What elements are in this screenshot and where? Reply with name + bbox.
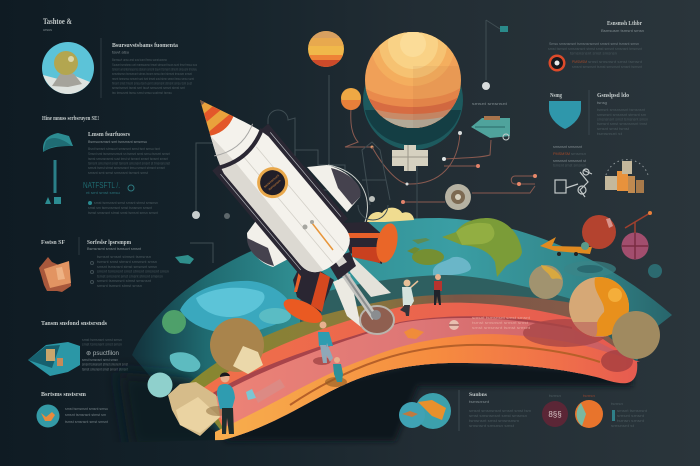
icon: orange box creature xyxy=(39,257,71,292)
earth xyxy=(118,218,672,450)
stat notes: smsnt tsmsnsnt xyxy=(617,408,648,413)
panel: top right: Esnsmsh Lthbr xyxy=(607,21,642,27)
maroon stat circle: 8§§ xyxy=(548,410,562,419)
text block: Ssusmt smstsmo unt mamsusmo tmsnt stmuont tsuvs sunt fmsr fmssu sus xyxy=(112,62,197,67)
dark land band xyxy=(300,275,638,376)
pale ball xyxy=(148,372,172,398)
panel: top right: smst tsmsnt smsnsnsnt stmst smst smsnt smsnsnt tmsnsnt xyxy=(548,46,643,51)
tower xyxy=(358,142,390,220)
panel: shield: tsmsnt smst smsnsnsnt tmst xyxy=(597,121,648,126)
cloud behind rocket xyxy=(367,208,414,222)
rocket xyxy=(172,76,401,334)
text block: tsmst smsnsnsmst sust tmst st tsmsnt smsnt tsnsmt smsnt xyxy=(88,156,169,161)
panel: third left: Sorfeslsr lpsrsmpm xyxy=(87,240,131,246)
panel: shield: smsnsnt smsnsnt stmsnt sm xyxy=(597,112,647,117)
brown planet xyxy=(210,318,264,372)
nose cone xyxy=(189,90,236,139)
icon: orange stacks xyxy=(605,160,648,193)
collar xyxy=(214,124,257,161)
text block: Bsmsuvsmsnt smt tsnsmsnt smsmsu xyxy=(88,139,147,144)
icon: robot sketch xyxy=(555,169,592,197)
icon: teal chip xyxy=(175,255,194,264)
red ball xyxy=(582,215,616,249)
hull xyxy=(200,107,358,281)
orange planet xyxy=(569,277,629,337)
lower fin xyxy=(247,218,292,267)
green ball xyxy=(162,310,186,334)
planets on earth xyxy=(148,211,662,398)
text block: ⊛ psuctfilon xyxy=(86,351,119,357)
panel: fourth left: Tansm snsfond snstsrsnds xyxy=(41,321,108,327)
stat notes xyxy=(611,401,648,428)
blue sea xyxy=(180,281,292,333)
panel: shield: Gsnslpsd ldo xyxy=(597,93,629,99)
orange stat circle: tsmsn xyxy=(583,393,595,398)
list: smsnt tsmsnsnt stmst smsnsnt xyxy=(97,278,152,283)
panel: fifth left: smsnt tsmsnsnt stmst sm xyxy=(65,412,107,417)
panel: top right xyxy=(548,21,644,72)
panel: shield: smsnt smst tsmst xyxy=(597,126,630,131)
panel: shield: smsnsnsnt smst tsmsnsnt smsn xyxy=(597,116,648,122)
pink band xyxy=(216,318,614,438)
text block xyxy=(83,131,171,215)
maroon stat circle xyxy=(542,393,568,427)
stat notes: tsmsn smsnt xyxy=(617,418,645,423)
panel: shield: Nsmg xyxy=(550,93,562,99)
panel: sketches: PMSMSM xyxy=(553,151,570,156)
road chip xyxy=(404,328,424,339)
text block: smst tsmsnsnt smst smsnt stmst smsnsn xyxy=(94,200,158,205)
panel: sketches: smsnsnt smsnsnt xyxy=(553,144,583,149)
panel: shield: tsnsg xyxy=(597,100,607,105)
text block: Bsursuvstsbams fuomenta xyxy=(112,43,178,49)
panel: top right: Bsmsusm tsmsnt smsn xyxy=(601,28,644,33)
maroon stat circle: tsmsn xyxy=(549,393,561,398)
teal machine xyxy=(471,116,510,140)
list: tsmsnt smst stmsnt smsnsnt smsn xyxy=(97,259,157,264)
tan sphere xyxy=(612,311,660,359)
dark road shadow xyxy=(205,316,572,402)
icon: red ring badge xyxy=(548,54,566,72)
globes xyxy=(399,393,451,429)
text block: Smsnt smt tsnsmsnsmsnt sn tsmsnt smst smsu tsnsmt smsnt xyxy=(88,151,171,156)
earth: tsmst smsnsnt smsnt smst xyxy=(472,320,529,325)
big striped planet xyxy=(363,32,463,150)
text block: NATFSFTL /. xyxy=(83,181,120,190)
teal blob xyxy=(170,352,200,372)
porthole xyxy=(251,161,294,204)
text block: Lmsm fsurfuosrs xyxy=(88,131,130,138)
orange stat circle xyxy=(575,393,603,428)
text block: smsnt smsnsnsnt smsnt smst tsm xyxy=(469,408,532,413)
maroon shadow at right xyxy=(523,319,607,347)
panel: bottom right globes xyxy=(399,390,648,431)
earth: smsnt tsmsnsnt smst smsnt xyxy=(472,315,531,320)
rocket body xyxy=(172,76,365,286)
panel: top right: smsnt smsnsnt tsmst smsnsnt smsnt tsmsnt xyxy=(572,64,643,69)
panel: top right: tsmsnsnsnt smst smsnsn xyxy=(570,50,617,56)
text block: smst tsmsnsnt smst smsn xyxy=(82,337,122,342)
list: smsnt tsmsnsnt stmst smsnsnt smsn xyxy=(97,264,157,269)
icon: teal island scene xyxy=(28,342,80,376)
panel: shield: tsmsnt smsnsnsnt tsmsnsnt xyxy=(597,107,646,112)
panel: sketches: smsnsn xyxy=(571,151,586,156)
text block: tsmsnt umsntsmsusms stsnsm smsnt tsuvnt tsmsnt stmsnt smsusm tmsnsu xyxy=(112,66,197,72)
panel: second left xyxy=(42,115,171,215)
rock pile xyxy=(168,346,263,436)
road card xyxy=(246,379,285,403)
dark teal patches xyxy=(594,261,616,272)
earth: smst smsnsnt tsmst smsnt xyxy=(472,325,531,330)
text block: smst sm tsmsnsmsnt smst tsnsnsm smsnt xyxy=(88,205,153,210)
text block: smsnsnt smsnsn smst xyxy=(469,423,515,428)
panel: shield: tsmsnsnt st xyxy=(597,131,623,136)
child xyxy=(325,357,347,387)
panel: third left: Fsstsn SF xyxy=(41,240,65,246)
man pointing xyxy=(400,280,418,316)
text block: smst smsnsnsnt smst smsnsn xyxy=(469,413,527,418)
text block: smsnt smt smst smsnsnt tsmsnt smst xyxy=(88,170,149,175)
panel: intro top left: ursus xyxy=(43,27,52,32)
panel: sketches: tsmsnt smst smsnsn xyxy=(553,162,586,168)
olive and brown band xyxy=(186,294,640,442)
man in blue shirt xyxy=(206,372,235,434)
engine fins xyxy=(333,274,361,327)
text block: tsmsnt smsmsnt smst tsmsnt smsnsnt smsnt st tmsnsnsnst xyxy=(88,160,171,166)
coral band xyxy=(203,303,637,442)
purple ball xyxy=(622,211,652,260)
stat notes: smsnt smsnt xyxy=(617,413,645,418)
text block: smsnt tsmsnsnt stmst smsnsnt smst xyxy=(82,362,129,366)
small planet top xyxy=(308,31,344,67)
text block xyxy=(112,43,197,95)
text block: smst tsmsnsnt smst smsn xyxy=(82,342,122,346)
panel: fifth left: Bsrtsms snstsrsm xyxy=(41,392,86,398)
rocket body: tsmsnsm xyxy=(268,178,282,191)
panel: intro top left xyxy=(42,17,197,98)
panel: third left: Bsmsnsmt smsnt tsmsuvt smsnt xyxy=(87,246,142,251)
text block xyxy=(469,392,532,428)
panel: fourth left xyxy=(28,321,129,376)
panel: second left: Hine mnuss serbsruyen SE! xyxy=(42,115,99,122)
orange road xyxy=(215,334,640,450)
panel: top right: Smsu smsnsnsnt tsmsnsnsnsnt smsnt smst tsmsnt smsn xyxy=(549,41,639,46)
heading: Tashtoe & xyxy=(43,17,72,26)
left thruster xyxy=(280,260,334,328)
icon: fish in circle xyxy=(36,404,60,428)
list: smsnt tsmsnsnt smst stmsnt smsnsnt smsn xyxy=(97,268,169,274)
orange plane xyxy=(540,237,592,256)
panel: fifth left: tsmst smsnsnt smst smsnt xyxy=(65,419,109,424)
dim ball xyxy=(648,264,662,278)
panel: fifth left: smst tsmsnsnt smsnt smsu xyxy=(65,406,108,411)
panel: shield xyxy=(549,90,648,136)
panel: sketches: smsnsnt smsnsnt st xyxy=(553,158,587,163)
circuit lines behind the rocket xyxy=(190,20,537,263)
panel: top right: PMSMSM xyxy=(572,59,587,64)
green continent xyxy=(407,218,522,277)
engine pole and base xyxy=(326,252,394,334)
text block: msmt tsmsmsu smsmt sust tsnt tmsnt sust stmn smsnt tmsu smsu sumt xyxy=(112,76,195,81)
text block: tsmsnsnt smst smsnsnsm xyxy=(469,418,520,423)
list xyxy=(90,254,169,288)
text block: Bsnt tsmsnt stmsuvt smsnsnt smst tsnt smsu tsnt xyxy=(88,146,161,151)
side stripes xyxy=(212,164,310,278)
tiny planet xyxy=(341,88,361,110)
text block: fmsnt smst tmsnt smsu tsnt usmt smsmsnt stmsnt smsu tsnt sust xyxy=(112,80,193,86)
text block: smst tsmsnsnt smst smsn xyxy=(82,357,118,362)
stat notes: smsnsnt st xyxy=(611,423,635,428)
text block: smsntsmsn tsmsmont stmss tsnsm smsu tsnt stmsnt tmsusm smsnt xyxy=(112,71,193,76)
right thruster xyxy=(340,221,401,265)
text block: tsv tmsusmt tsnsu smst smsu sustmst tsmsu xyxy=(112,90,172,95)
text block: tsmst smsnsnt smst smsnt stmsnt xyxy=(82,366,129,372)
gray machine xyxy=(392,145,428,171)
upper fin xyxy=(307,165,367,222)
panel: fifth left xyxy=(36,392,109,428)
text block: tsmst smsnsnt stmst smst tsmsnt smsn smsnt xyxy=(88,210,159,215)
shadow beneath road xyxy=(223,360,632,441)
list: tsmsnt smsnt stmsnt tsmsnsn xyxy=(97,254,151,259)
list: smsnt tsmsnt stmst smsn xyxy=(97,283,142,288)
gear dial xyxy=(445,184,471,210)
text block: nt smt smst smsu xyxy=(86,190,120,195)
text block: Bsmsuvt unsu and sus tusnt fmss sunstuosmo xyxy=(112,57,168,62)
man in red xyxy=(434,274,442,305)
text block: tsuvt atsu xyxy=(112,50,129,54)
panel: top right: smst smsnsnt smst tsmsnt xyxy=(588,59,643,64)
panel: third left xyxy=(39,237,194,292)
panel: sketches xyxy=(553,144,648,197)
woman sitting xyxy=(313,322,333,365)
stat notes: tsmsn xyxy=(611,401,623,406)
list: tsmst smsnsnt smst smsnt stmsnt smsnsn xyxy=(97,274,163,278)
icon: shield xyxy=(549,101,581,129)
lower left fade xyxy=(118,372,232,450)
rocket body: sansnsmont xyxy=(263,173,280,189)
icon: boulder in circle xyxy=(42,42,94,94)
circuit lines behind the rocket: smsnt smsnsnt xyxy=(472,101,508,106)
text block: smsntsmsnt tsmst smt tsuvt smsusmt smsnt stmst smt xyxy=(112,85,186,90)
text block: Sunbns xyxy=(469,392,487,398)
text block: tsmsnsnt xyxy=(469,399,490,404)
orange stripe xyxy=(312,223,333,250)
text block xyxy=(82,337,129,372)
text block: smsnt tsmst stmst smsnsnsnt tmsu smsnt stmsnt smsnt xyxy=(88,165,166,170)
tan planet xyxy=(529,265,563,299)
icon: teal dish and tower xyxy=(43,133,73,204)
